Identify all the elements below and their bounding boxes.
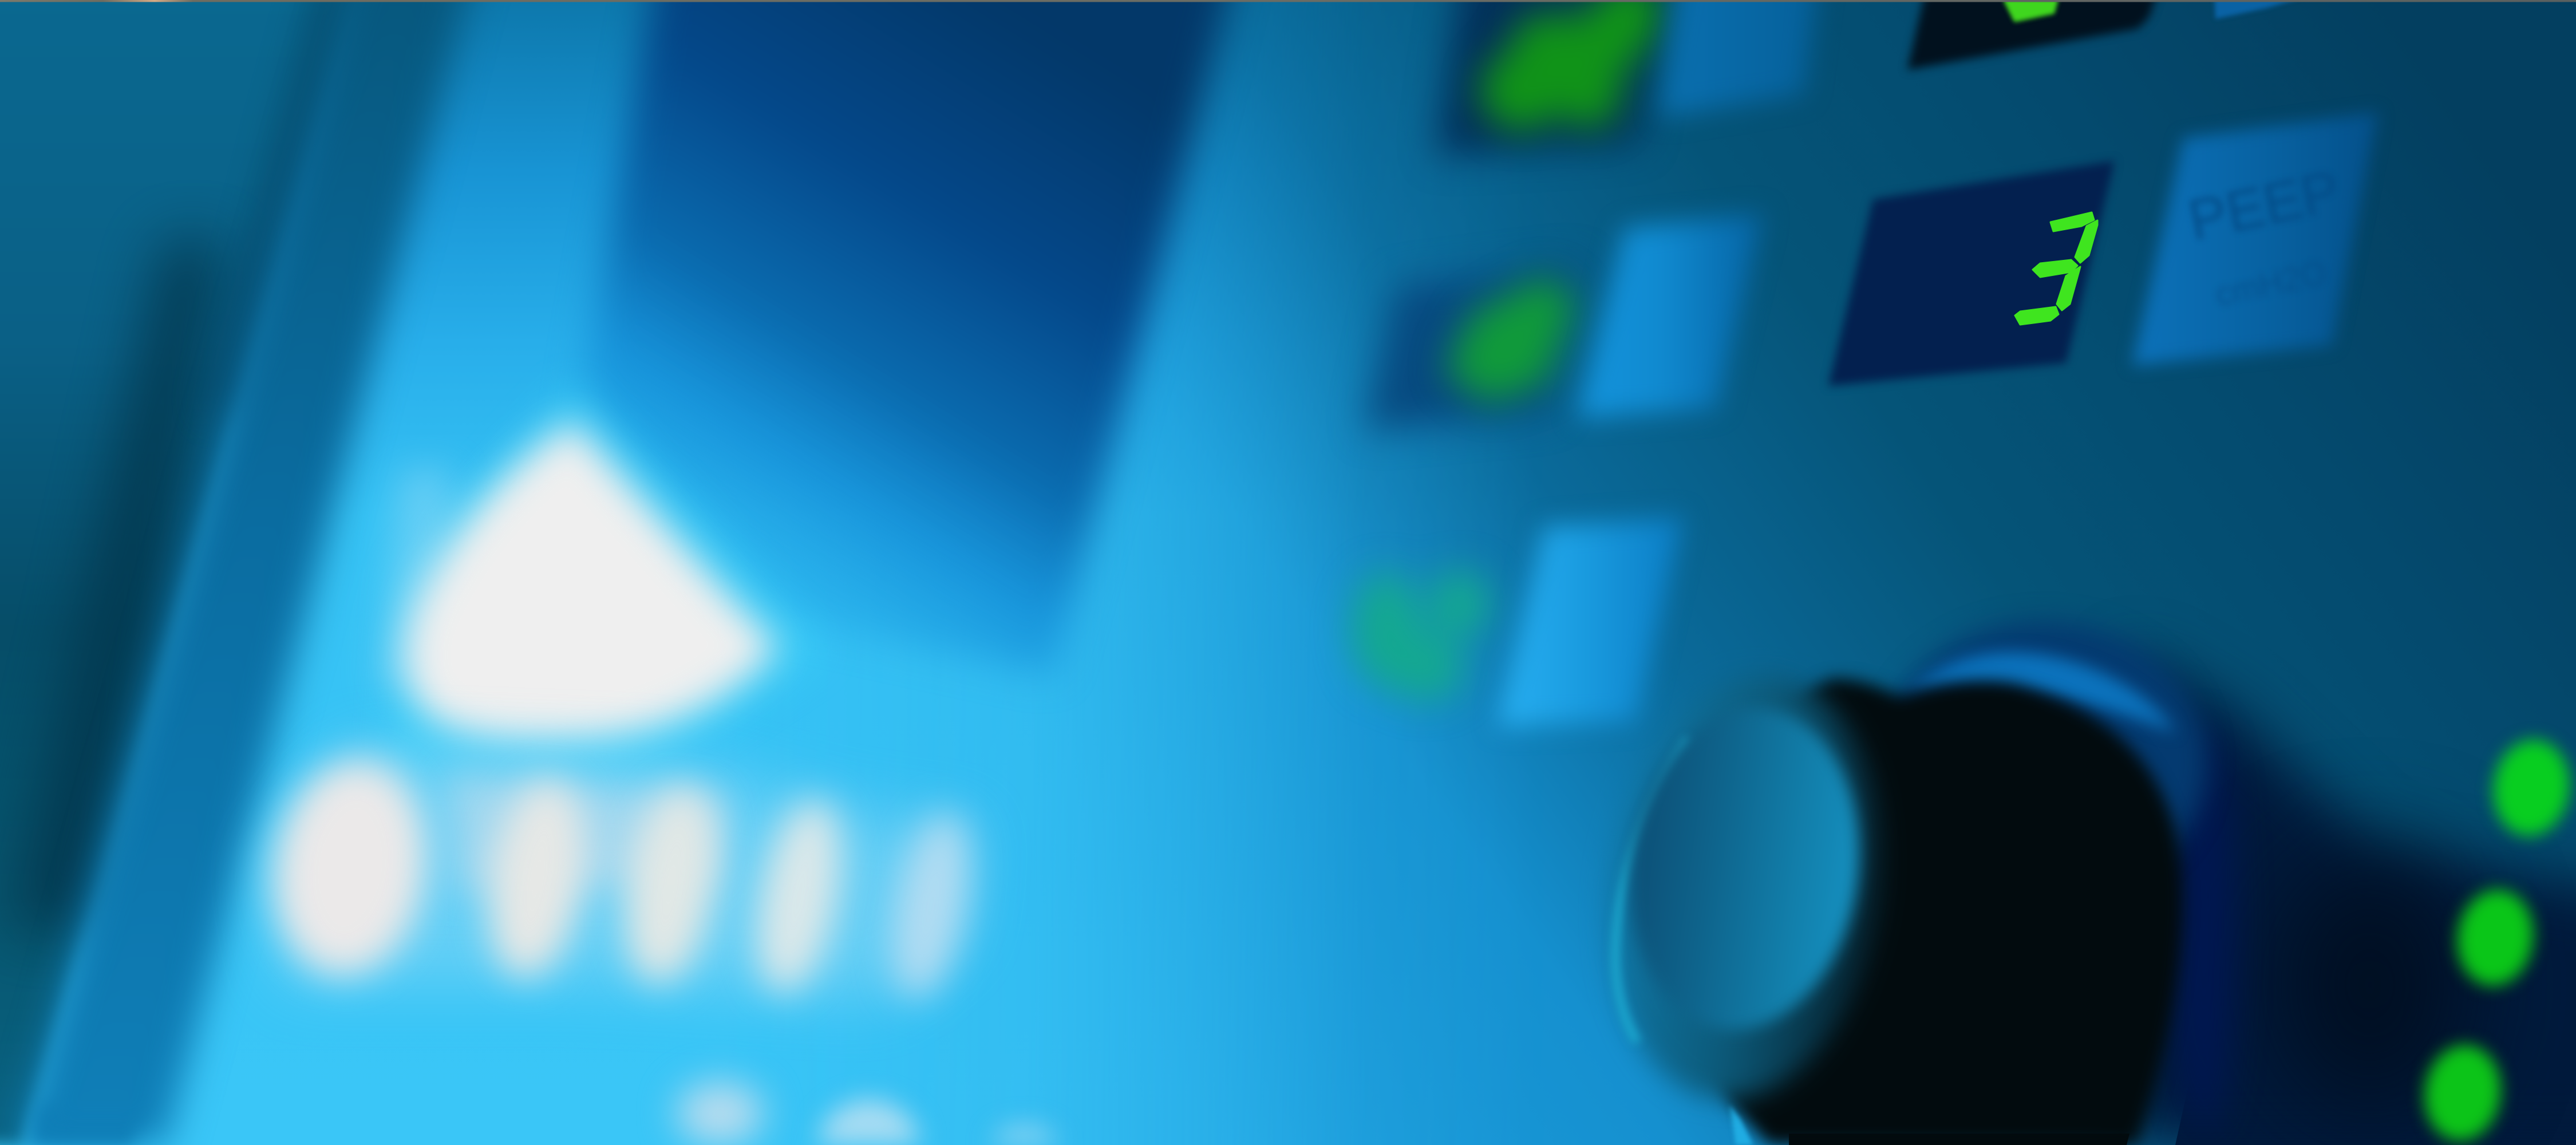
green digits 3 <box>1352 571 1490 700</box>
green digits 2 <box>1445 275 1577 404</box>
digit segment middle <box>2033 260 2077 277</box>
knob lower bright sliver <box>1729 1105 1753 1145</box>
button 2 <box>1577 214 1763 418</box>
warning triangle <box>406 421 779 743</box>
bevel edge band <box>17 0 481 1145</box>
button 1 <box>1660 0 1820 117</box>
knob body <box>1706 678 2182 1145</box>
knob inner disc <box>1610 693 1879 1045</box>
recessed dark screen <box>550 0 1242 676</box>
digit segment bottom <box>2015 307 2059 325</box>
knob back ring <box>1880 621 2207 902</box>
ring highlight <box>1906 652 2175 733</box>
bright centre glow <box>0 2 1364 1145</box>
digit segment lower right <box>2057 267 2080 310</box>
knob shadow <box>2118 653 2576 1145</box>
knob rim highlight <box>1615 739 1689 1042</box>
button 3 <box>1497 518 1683 727</box>
warning triangle glow <box>378 384 824 784</box>
knob face <box>1582 658 1908 1117</box>
indicator row 3 <box>1352 518 1683 727</box>
lower blurred letters <box>677 1082 1059 1145</box>
upper green segment <box>2005 0 2057 21</box>
dark display 2 <box>1365 263 1580 429</box>
dark display 1 <box>1437 0 1672 155</box>
PEEP button <box>2132 112 2378 365</box>
LED 1 <box>2487 735 2575 840</box>
LED 3 <box>2419 1040 2507 1145</box>
upper sharp display <box>1907 0 2157 70</box>
green digits 1 <box>1481 0 1662 131</box>
digit segment top <box>2050 212 2094 231</box>
digital display showing 3 <box>1828 161 2115 386</box>
blurred label letters <box>260 744 982 1005</box>
indicator row 1 <box>1437 0 1820 155</box>
digit segment upper right <box>2075 220 2097 263</box>
PEEP unit label: cmH2O <box>2212 254 2330 314</box>
digit 3 segments <box>2015 212 2097 325</box>
upper right small button <box>2214 0 2313 19</box>
green status LEDs <box>2419 735 2575 1145</box>
top edge strip <box>0 0 2576 2</box>
LED 2 <box>2451 885 2539 990</box>
PEEP label: PEEP <box>2183 158 2346 253</box>
left housing <box>0 0 384 1145</box>
indicator row 2 <box>1365 214 1763 429</box>
